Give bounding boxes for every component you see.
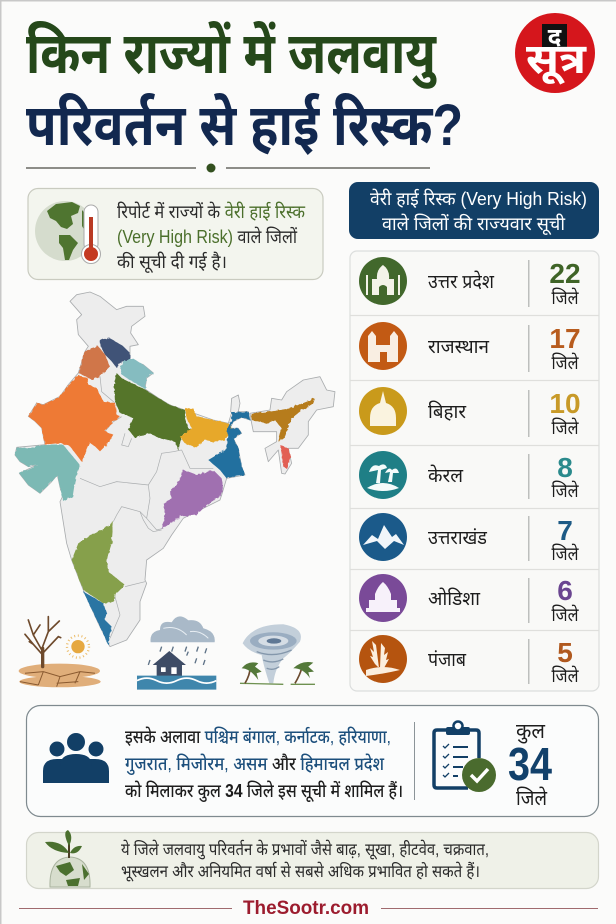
total count — [508, 720, 552, 810]
text: impact note: भूस्खलन और अनियमित वर्षा से सबसे अधिक प्रभावित हो सकते हैं। — [121, 860, 480, 883]
icon: cyclone and bent palms — [240, 624, 315, 684]
state: West Bengal — [208, 412, 250, 478]
row: Uttar Pradesh — [359, 257, 581, 308]
state: Rajasthan — [28, 375, 120, 462]
state: Odisha — [162, 470, 223, 529]
text: additional states: गुजरात, मिजोरम, असम और हिमाचल प्रदेश — [125, 753, 384, 776]
row: Uttar Pradesh: जिले — [552, 287, 579, 308]
logo: The Sootr: द — [548, 24, 562, 51]
row: Bihar: जिले — [552, 417, 579, 438]
row: Kerala — [359, 451, 579, 501]
state: Himachal Pradesh — [100, 338, 130, 368]
row: Bihar: बिहार — [428, 401, 467, 423]
title: परिवर्तन से हाई रिस्क? — [26, 93, 463, 158]
heading: state-wise list — [349, 182, 599, 239]
intro text: (Very High Risk) वाले जिलों — [117, 226, 297, 247]
row: Bihar: 10 — [549, 388, 581, 419]
row: Uttarakhand — [359, 513, 579, 564]
text: impact note — [121, 838, 489, 883]
state: Uttarakhand — [120, 359, 153, 389]
text: additional states: को मिलाकर कुल 34 जिले इस सूची में शामिल हैं। — [125, 780, 403, 803]
intro text: रिपोर्ट में राज्यों के वेरी हाई रिस्क — [117, 201, 306, 222]
row: Bihar — [359, 387, 581, 438]
row: Kerala: 8 — [557, 452, 573, 483]
map of India — [15, 292, 335, 647]
row: Punjab: 5 — [557, 637, 573, 668]
state: Karnataka — [72, 522, 125, 603]
text: impact note: ये जिले जलवायु परिवर्तन के प्रभावों जैसे बाढ़, सूखा, हीटवेव, चक्रवात, — [121, 838, 489, 861]
text: additional states — [125, 726, 403, 803]
row: Uttarakhand: जिले — [552, 543, 579, 564]
row: Uttar Pradesh: 22 — [549, 258, 581, 289]
state: Punjab — [78, 346, 110, 380]
icon: plant on globe — [45, 830, 90, 887]
icon: clipboard with check — [434, 722, 496, 792]
logo: The Sootr: सूत्र — [526, 35, 587, 85]
heading: state-wise list: वाले जिलों की राज्यवार सूची — [382, 213, 565, 236]
state: Assam — [252, 398, 315, 442]
icon: wheat — [366, 641, 400, 676]
total count: जिले — [516, 786, 548, 810]
icon: flood house and rain cloud — [137, 616, 216, 690]
row: Odisha: जिले — [552, 604, 579, 625]
text: additional states: इसके अलावा पश्चिम बंगाल, कर्नाटक, हरियाणा, — [125, 726, 391, 747]
row: Uttar Pradesh: उत्तर प्रदेश — [428, 270, 495, 293]
intro text: की सूची दी गई है। — [117, 251, 227, 274]
panel: state list — [350, 251, 599, 691]
row: Kerala: केरल — [428, 464, 464, 487]
row: Kerala: जिले — [552, 480, 579, 501]
row: Odisha: 6 — [557, 575, 573, 606]
title divider — [26, 164, 430, 172]
state: Uttar Pradesh — [114, 373, 193, 451]
state: Bihar — [180, 408, 232, 447]
panel: intro callout — [28, 188, 323, 280]
footer: TheSootr.com — [243, 898, 369, 919]
row: Odisha: ओडिशा — [428, 588, 481, 610]
row: Rajasthan — [359, 322, 581, 373]
icon: fort — [368, 331, 398, 362]
row: Punjab: जिले — [552, 665, 579, 686]
icon: drought tree and sun — [19, 617, 101, 687]
state: Kerala — [83, 592, 112, 645]
icon: temple — [366, 582, 400, 612]
state: Gujarat — [15, 445, 80, 502]
icon: Taj Mahal — [366, 265, 400, 295]
row: Rajasthan: जिले — [552, 352, 579, 373]
panel: impact note — [26, 830, 598, 888]
icon: mountains — [363, 525, 404, 549]
row: Uttarakhand: 7 — [557, 515, 573, 546]
row: Rajasthan: 17 — [549, 323, 581, 354]
icon: stupa — [370, 391, 396, 426]
row: Rajasthan: राजस्थान — [428, 337, 489, 358]
intro text — [117, 201, 306, 274]
state: Mizoram — [280, 445, 291, 468]
logo: The Sootr — [515, 13, 595, 93]
icon: globe with thermometer — [35, 201, 100, 264]
icon: palm island — [367, 464, 399, 491]
total count: कुल — [516, 720, 546, 744]
heading: state-wise list: वेरी हाई रिस्क (Very High Risk) — [370, 188, 587, 209]
row: Odisha — [359, 574, 579, 625]
panel: total districts — [26, 706, 598, 816]
row: Punjab: पंजाब — [428, 650, 467, 671]
title: किन राज्यों में जलवायु — [26, 21, 437, 89]
icon: people — [43, 733, 109, 783]
row: Uttarakhand: उत्तराखंड — [428, 528, 488, 549]
total count: 34 — [508, 738, 552, 790]
title — [26, 21, 463, 158]
row: Punjab — [359, 635, 579, 686]
